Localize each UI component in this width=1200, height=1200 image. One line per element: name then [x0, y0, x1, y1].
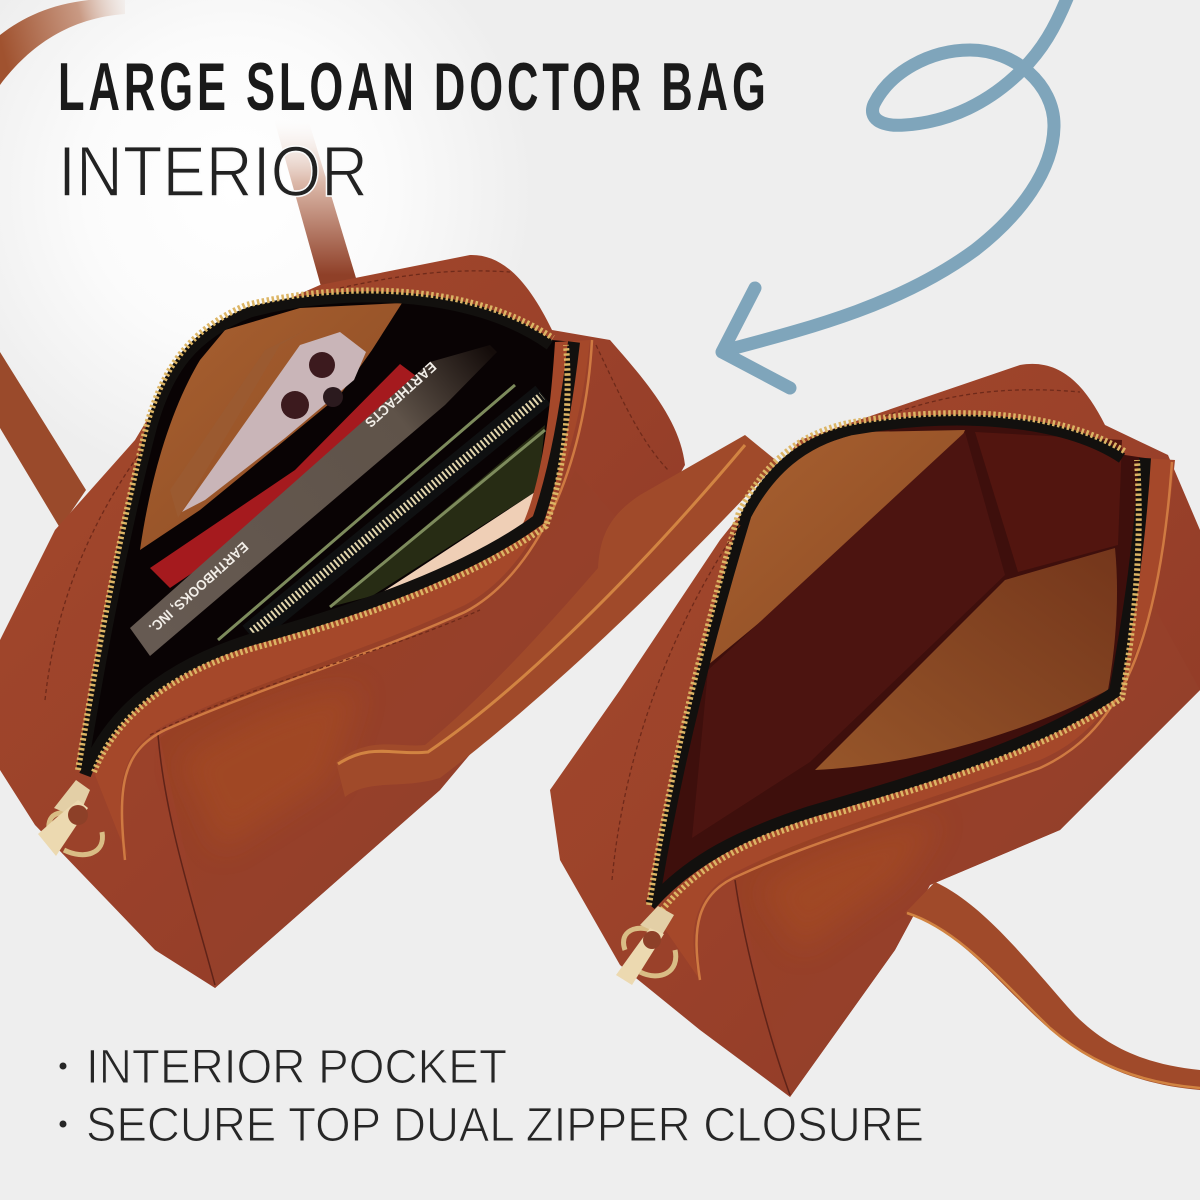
book: Earthfacts: EARTHFACTS: [362, 359, 440, 431]
zipper front: [650, 458, 1145, 905]
interior right wall: [975, 432, 1122, 572]
title line 2: INTERIOR: [58, 133, 368, 212]
lip edge: [697, 462, 1172, 980]
stitch lines: [612, 390, 1080, 880]
title: [58, 49, 766, 212]
feature: zipper closure: SECURE TOP DUAL ZIPPER CLOSURE: [86, 1099, 924, 1152]
zipper opening: [85, 294, 574, 775]
green zip wallet: [218, 385, 545, 640]
bag body: [550, 364, 1200, 1097]
feature list: [60, 1041, 924, 1152]
front strap: [336, 435, 778, 797]
strap edge: [338, 445, 745, 764]
red notebook: [150, 364, 416, 588]
zipper back: [654, 420, 1122, 900]
title line 1: LARGE SLOAN DOCTOR BAG: [58, 49, 766, 125]
front panel highlight: [760, 820, 940, 950]
opening: [650, 418, 1145, 905]
buckle: [616, 906, 676, 985]
back suede pocket: [708, 430, 965, 665]
corner seam: [735, 880, 790, 1095]
phone: [170, 328, 366, 518]
bullet 1: [60, 1062, 66, 1070]
curly arrow: [722, 0, 1068, 388]
cream pouch: [375, 492, 535, 597]
interior suede pocket: [140, 303, 402, 550]
strap edge: [907, 913, 1200, 1088]
back handle top: [0, 0, 125, 85]
zipper front: [85, 342, 574, 775]
feature: interior pocket: INTERIOR POCKET: [86, 1041, 507, 1094]
book spine labels: EARTHBOOKS, INC.: [146, 539, 252, 636]
corner seam: [158, 735, 215, 985]
bottom right strap: [905, 882, 1200, 1090]
left side handle: [0, 352, 86, 528]
front panel: [735, 600, 1200, 1097]
front panel: [160, 470, 640, 988]
bag body: [0, 255, 685, 988]
right bag: [550, 364, 1200, 1097]
stitch lines: [45, 271, 668, 735]
front flap lip: [655, 458, 1175, 980]
left bag: [0, 0, 778, 988]
back handle side: [272, 112, 356, 290]
bullet 2: [60, 1120, 66, 1128]
buckle: [38, 780, 102, 856]
lip edge: [122, 340, 592, 860]
front panel highlight: [180, 690, 360, 850]
interior wall: [692, 432, 1005, 838]
front flap lip: [95, 340, 590, 858]
zipper back: [82, 297, 550, 770]
interior floor: [815, 548, 1117, 770]
book: Earthfacts: [130, 345, 497, 656]
